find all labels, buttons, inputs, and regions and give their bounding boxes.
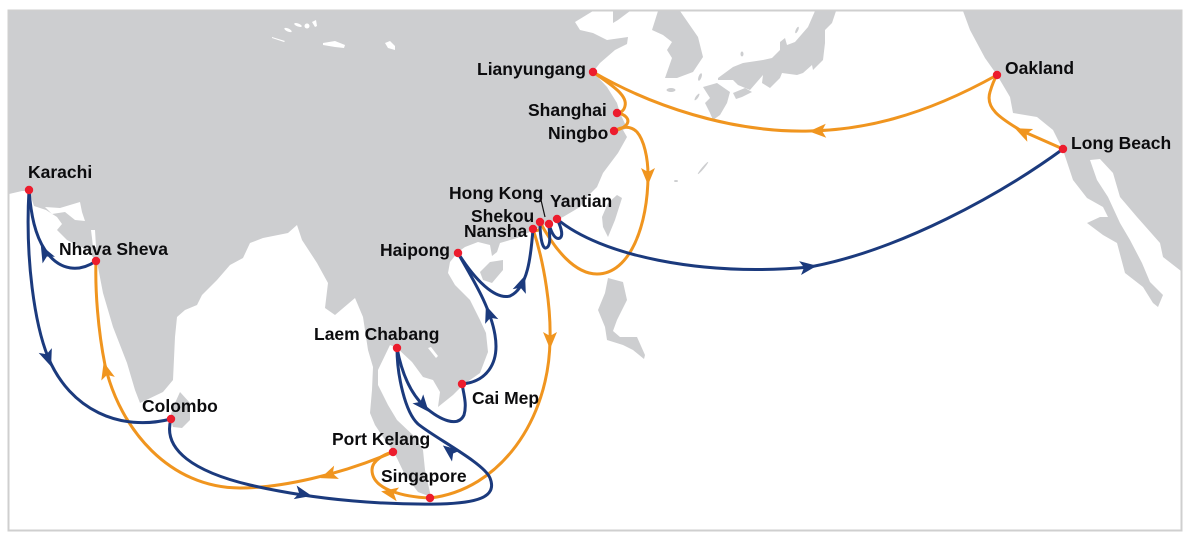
route: Singapore to Port Kelang [372,452,430,498]
label: Shanghai: Shanghai [528,100,607,120]
label: Haipong: Haipong [380,240,450,260]
route lines: orange service [96,72,1063,498]
label: Oakland: Oakland [1005,58,1074,78]
arrow: towards Laem Chabang [439,440,461,461]
route: Nhava Sheva to Karachi [29,190,96,268]
land: Korea [652,11,703,78]
route: Cai Mep to Haipong [458,253,496,384]
arrow: towards Oakland [1012,122,1033,142]
arrow: towards Singapore from Colombo [294,485,313,503]
label: Yantian: Yantian [550,191,612,211]
label: Shekou: Shekou [471,206,534,226]
route: Shekou to Hong Kong to Yantian [540,219,562,248]
label: Port Kelang: Port Kelang [332,429,430,449]
arrow: towards Lianyungang [809,124,826,138]
arrow: towards Nhava Sheva from Port Kelang [318,466,339,485]
land: Kyushu [703,83,730,120]
port markers [25,68,1067,502]
label: Karachi: Karachi [28,162,92,182]
label: Ningbo: Ningbo [548,123,608,143]
arrow: towards Port Kelang [380,485,399,501]
label: Nhava Sheva: Nhava Sheva [59,239,168,259]
arrow: towards Shekou [641,168,655,185]
arrow: towards Nhava Sheva [97,360,115,381]
land: Liaodong [613,11,630,23]
arrow: towards Singapore [543,332,557,349]
land: Taiwan [602,195,622,237]
land: small Japanese and Korean islands [666,26,800,182]
land: Hainan [480,260,503,283]
arrow: towards Haipong [479,303,498,324]
route: Shekou to Nansha [533,222,541,231]
route: Shanghai to Ningbo [614,113,628,131]
label: Colombo: Colombo [142,396,218,416]
label: Hong Kong: Hong Kong [449,183,543,203]
direction arrowheads [35,122,1033,503]
arrow: towards Long Beach [799,259,818,275]
leader line: Hong Kong [541,200,545,217]
label: Long Beach: Long Beach [1071,133,1171,153]
land: Shikoku [733,88,752,99]
land: North America and Baja California [963,11,1181,307]
route: Karachi to Colombo [28,190,171,423]
route: Lianyungang to Shanghai [593,72,625,113]
route: Port Kelang to Nhava Sheva [96,261,393,488]
route: Yantian to Long Beach [557,149,1063,269]
route: Colombo to Singapore and Laem Chabang [170,348,492,504]
arrow: towards Cai Mep [412,394,434,416]
route: Laem Chabang to Cai Mep [397,348,465,422]
land: Philippines [598,278,645,359]
route: Long Beach to Oakland [989,75,1063,149]
arrow: towards Nansha [513,273,532,294]
label: Singapore: Singapore [381,466,467,486]
route: Oakland to Lianyungang [593,72,997,131]
land: Honshu [718,11,836,90]
label: Laem Chabang: Laem Chabang [314,324,439,344]
lakes and inland water [45,20,438,358]
port labels [28,58,1171,486]
label: Lianyungang: Lianyungang [477,59,586,79]
label: Cai Mep: Cai Mep [472,388,539,408]
route lines: navy service [28,149,1063,504]
route: Haipong to Nansha [458,229,533,297]
route: Nansha to Singapore [430,229,550,498]
land: Asia mainland [9,11,628,497]
arrow: towards Karachi [35,242,55,263]
arrow: towards Colombo [39,348,58,369]
label: Nansha: Nansha [464,221,527,241]
route: Ningbo to Shekou [540,127,648,274]
land: Sri Lanka [170,392,190,428]
